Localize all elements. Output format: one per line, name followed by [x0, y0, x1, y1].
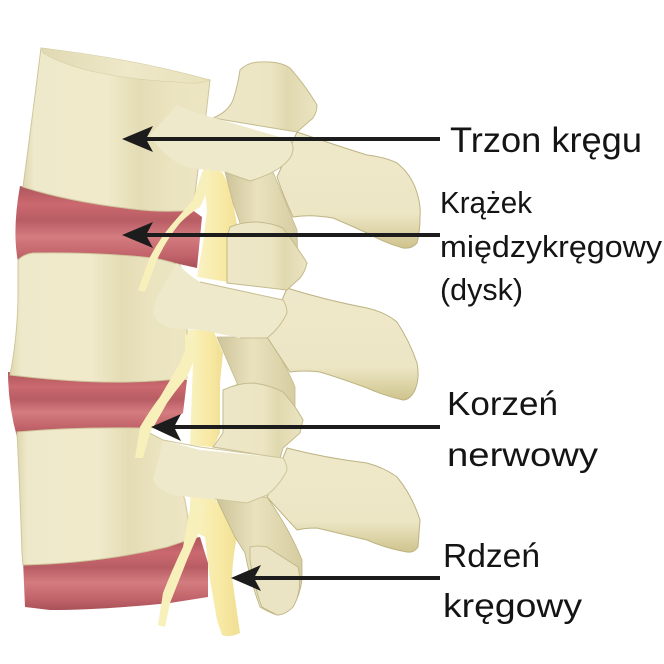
arrow: spinal cord — [231, 565, 440, 591]
vertebral body 2 — [10, 253, 190, 382]
spinal cord — [187, 168, 240, 636]
pedicle 2 — [153, 263, 287, 338]
vertebra 2 — [10, 222, 418, 440]
arrow: nerve root — [151, 414, 440, 441]
labels — [440, 121, 663, 624]
vertebral body 1 — [23, 48, 210, 211]
lower laminae 3 — [217, 497, 302, 615]
nerve root 3 — [158, 497, 205, 627]
label: Rdzeń kręgowy: Rdzeń — [443, 537, 540, 574]
nerve root 2 — [135, 332, 193, 458]
label: Trzon kręgu: Trzon kręgu — [450, 121, 642, 160]
label: Krążek międzykręgowy (dysk): międzykręgowy — [440, 230, 663, 264]
pedicle 3 — [153, 440, 287, 503]
laminae 2 — [217, 337, 295, 440]
panel: spine illustration — [8, 48, 440, 636]
arrow: vertebral body — [122, 126, 440, 152]
arrow: disc — [122, 222, 440, 248]
label: Rdzeń kręgowy: kręgowy — [443, 587, 583, 624]
nerve root 1 — [138, 168, 210, 292]
intervertebral disc 1 — [15, 186, 202, 268]
laminae 1 — [225, 172, 298, 270]
vertebra 3 — [17, 383, 420, 615]
inferior articular process — [250, 546, 300, 615]
vertebra 1 — [23, 48, 420, 270]
spinous process 3 — [267, 448, 420, 552]
pedicle 1 — [150, 105, 293, 181]
label: Krążek międzykręgowy (dysk): Krążek — [440, 186, 533, 220]
label: Krążek międzykręgowy (dysk) — [440, 186, 663, 307]
label: Korzeń nerwowy: Korzeń — [447, 385, 558, 422]
vertebral body 3 — [17, 428, 197, 565]
spinous process 1 — [277, 132, 420, 248]
label: Korzeń nerwowy: nerwowy — [447, 436, 599, 473]
label: Krążek międzykręgowy (dysk): (dysk) — [440, 273, 523, 307]
articular process 3 — [213, 383, 303, 458]
label: Rdzeń kręgowy — [443, 537, 583, 624]
label: Korzeń nerwowy — [447, 385, 599, 473]
articular process 2 — [227, 222, 307, 290]
arrows — [122, 126, 440, 591]
spinous process 2 — [267, 288, 418, 400]
intervertebral disc 2 — [8, 372, 187, 437]
intervertebral disc 3 — [23, 537, 208, 610]
body top 1 — [41, 48, 210, 83]
articular process 1 — [213, 62, 317, 132]
